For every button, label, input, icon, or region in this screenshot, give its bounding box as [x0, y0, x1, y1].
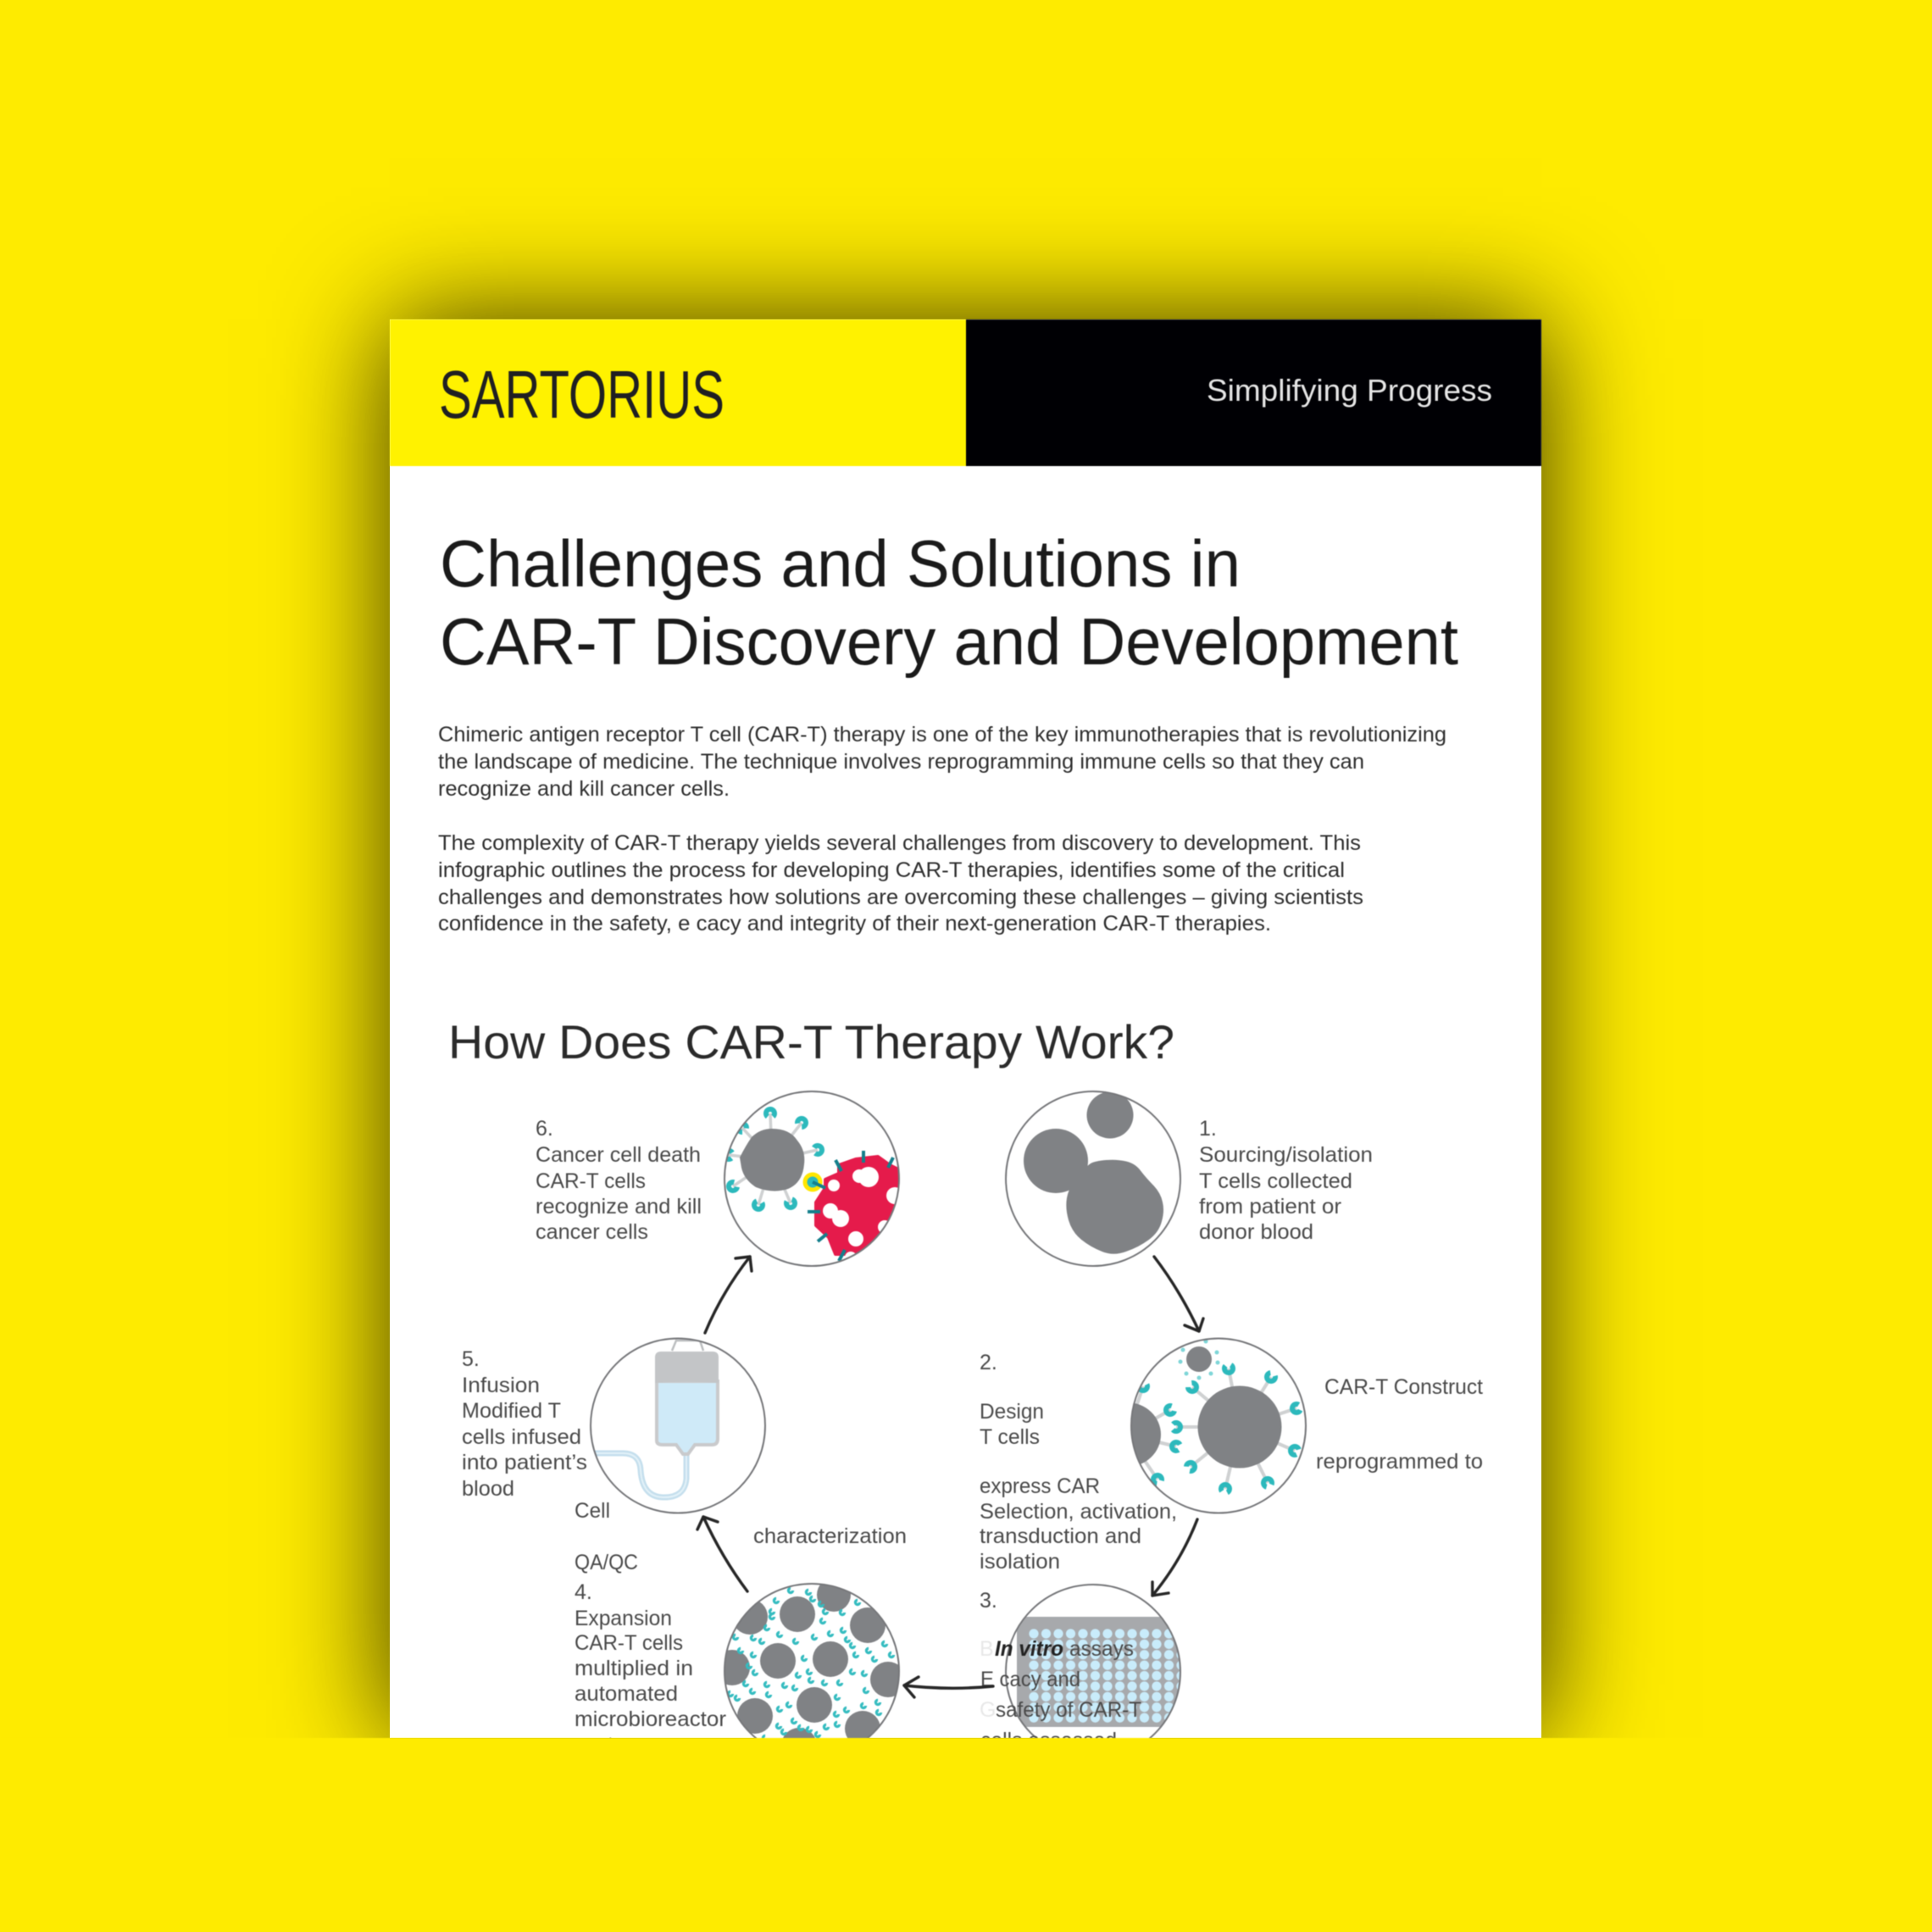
step 1 label: donor blood [1199, 1220, 1313, 1244]
logo: Sartorius: SARTORIUS [439, 357, 724, 432]
document card with drop shadow [390, 319, 1541, 1738]
step 4 label [575, 1499, 726, 1757]
step 2 label: express CAR [980, 1474, 1100, 1498]
arrow: step 5 to 6 [705, 1257, 752, 1333]
arrow: step 2 to 3 [1152, 1519, 1197, 1596]
step 4 label: CAR-T cells [575, 1631, 683, 1655]
reprogrammed label: reprogrammed to [1316, 1450, 1483, 1474]
CAR-T construct label: CAR-T Construct [1324, 1375, 1483, 1399]
intro paragraph 2: confidence in the safety, e cacy and integrity of their next-generation CAR-T therapies. [438, 912, 1271, 935]
step 2 label: Design [980, 1400, 1044, 1424]
arrow: step 1 to 2 [1154, 1257, 1203, 1331]
step 4 label: 4. [575, 1580, 592, 1604]
step 3 label: 3. [980, 1589, 997, 1613]
step 4 label: QA/QC [575, 1551, 638, 1574]
step 5 label: Modified T [462, 1399, 561, 1423]
step 6 circle: cancer cell death [724, 1091, 903, 1266]
step 3 label: B [980, 1637, 994, 1661]
arrow: step 4 to 5 [697, 1517, 747, 1591]
step 1 circle: T cells [1006, 1091, 1180, 1266]
tagline: Simplifying Progress [1207, 373, 1492, 408]
section heading: How Does CAR-T Therapy Work? [448, 1015, 1174, 1069]
step 1 label: 1. [1199, 1117, 1217, 1141]
step 3 label: cells assessed [980, 1729, 1117, 1752]
step 1 label: Sourcing/isolation [1199, 1143, 1373, 1167]
intro paragraph 1: recognize and kill cancer cells. [438, 777, 730, 801]
step 6 label: recognize and kill [536, 1195, 702, 1219]
step 1 label [1199, 1117, 1373, 1244]
step 3 label: assays [1069, 1637, 1134, 1661]
intro paragraph 2: infographic outlines the process for developing CAR-T therapies, identifies some of the critical [438, 858, 1345, 882]
step 5 label: blood [462, 1477, 514, 1501]
step 4 label: multiplied in [575, 1657, 693, 1680]
intro paragraph 2 [438, 831, 1363, 935]
step 6 label [536, 1117, 702, 1244]
step 4 label: Cell [575, 1499, 610, 1523]
title: CAR-T Discovery and Development [440, 604, 1458, 679]
intro paragraph 2: The complexity of CAR-T therapy yields several challenges from discovery to development. This [438, 831, 1361, 855]
step 5 label: cells infused [462, 1425, 581, 1449]
intro paragraph 1: Chimeric antigen receptor T cell (CAR-T) therapy is one of the key immunotherapies that is revolutionizing [438, 723, 1446, 747]
step 6 label: cancer cells [536, 1220, 648, 1244]
step 4 label: microbioreactor [575, 1707, 726, 1731]
intro paragraph 2: challenges and demonstrates how solutions are overcoming these challenges – giving scientists [438, 886, 1363, 909]
step 3 label: E cacy and [980, 1668, 1080, 1691]
step 1 label: T cells collected [1199, 1169, 1352, 1193]
step 3 label: G [980, 1698, 996, 1722]
step 4 label: automated [575, 1682, 678, 1706]
step 6 label: Cancer cell death [536, 1143, 701, 1167]
arrow: step 3 to 4 [904, 1677, 993, 1697]
step 2 label: T cells [980, 1425, 1040, 1449]
intro paragraph 1: the landscape of medicine. The technique involves reprogramming immune cells so that they can [438, 750, 1364, 774]
step 5 label: into patient’s [462, 1451, 587, 1474]
step 2 label [980, 1351, 1177, 1574]
step 1 label: from patient or [1199, 1195, 1341, 1219]
step 6 label: 6. [536, 1117, 553, 1141]
step 3 label [980, 1589, 1141, 1752]
step 5 label: Infusion [462, 1374, 540, 1397]
step 4 label: Expansion [575, 1607, 672, 1630]
step 2 label: 2. [980, 1351, 997, 1374]
header band [390, 319, 1541, 466]
characterization label: characterization [753, 1524, 907, 1548]
step 4 label: systems [575, 1733, 655, 1757]
step 2 label: Selection, activation, [980, 1500, 1177, 1524]
step 6 label: CAR-T cells [536, 1169, 646, 1193]
step 5 label: 5. [462, 1347, 480, 1371]
title: Challenges and Solutions in [440, 526, 1241, 601]
intro paragraph 1 [438, 723, 1446, 801]
step 3 label: safety of CAR-T [996, 1698, 1141, 1722]
step 2 circle: design T cells [1130, 1337, 1307, 1515]
bottom yellow band [0, 1738, 1932, 1932]
step 2 label: transduction and [980, 1524, 1141, 1548]
step 3 circle: assay plate [1004, 1583, 1182, 1739]
step 4 circle: expansion [723, 1582, 901, 1739]
step 3 label: In vitro [995, 1637, 1063, 1661]
step 5 circle: infusion bag [591, 1339, 765, 1513]
step 5 label [462, 1347, 587, 1501]
title [440, 526, 1458, 679]
step 2 label: isolation [980, 1550, 1060, 1574]
